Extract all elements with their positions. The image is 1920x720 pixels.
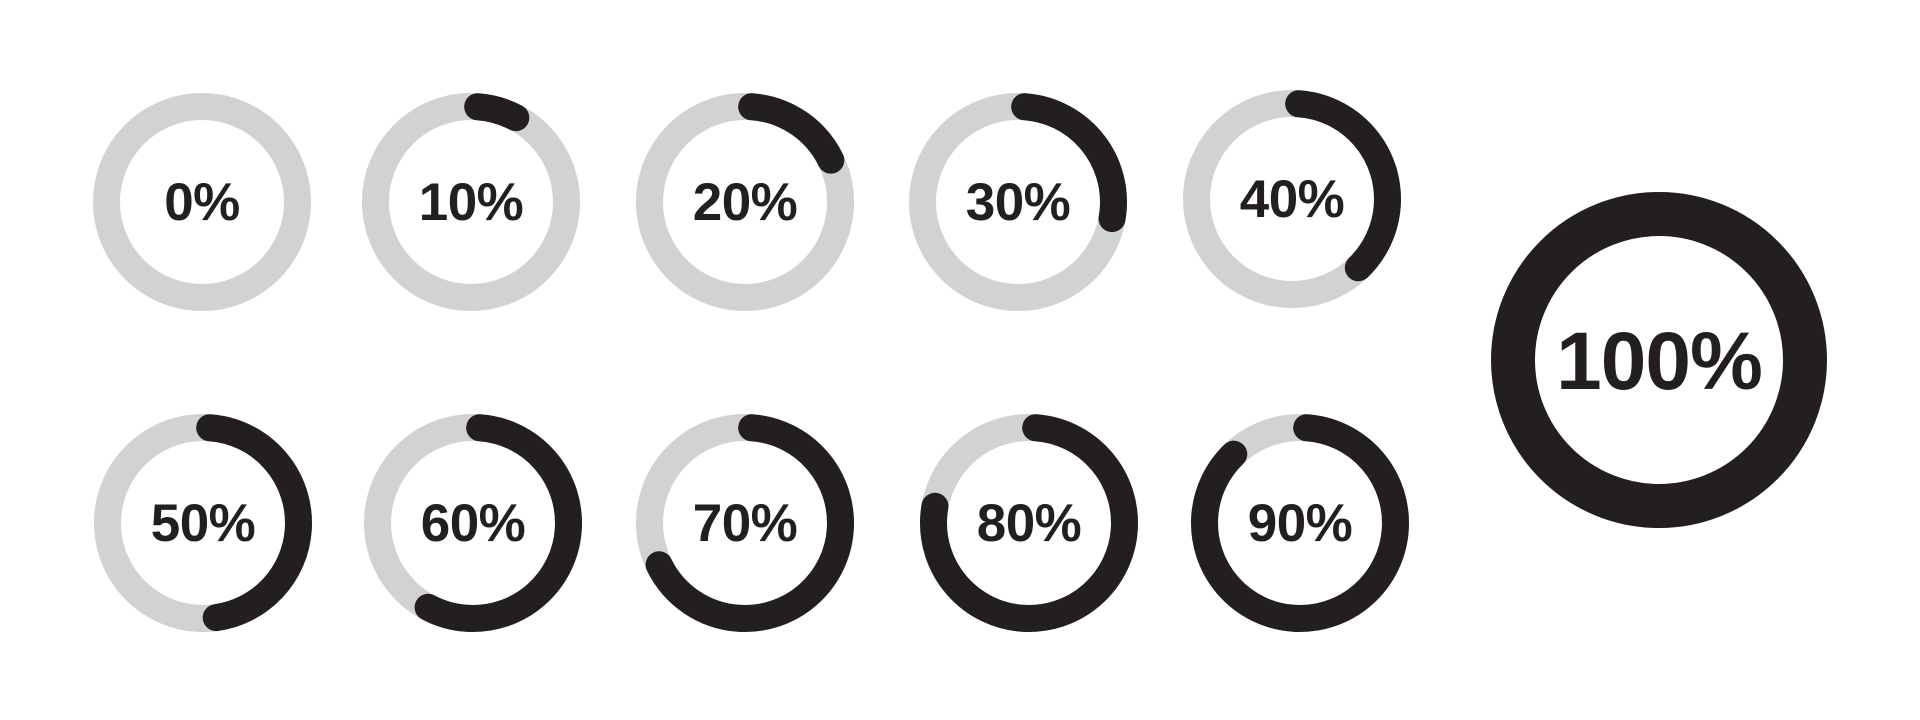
donut: 30%: 30% xyxy=(966,173,1070,232)
donut: 40%: 40% xyxy=(1240,170,1344,229)
donut: 10% xyxy=(369,100,573,304)
donut: 10%: 10% xyxy=(419,173,523,232)
donut: 70%: 70% xyxy=(693,494,797,553)
donut: 50%: 50% xyxy=(151,494,255,553)
donut: 30% xyxy=(916,100,1120,304)
donut: 90%: 90% xyxy=(1248,494,1352,553)
donut: 50% xyxy=(101,421,305,625)
donut: 0% xyxy=(106,106,298,298)
donut: 100% large xyxy=(1513,214,1805,506)
donut: 70% xyxy=(643,421,847,625)
donut: 90% xyxy=(1198,421,1402,625)
donut: 80% xyxy=(927,421,1131,625)
donut: 80%: 80% xyxy=(977,494,1081,553)
donut: 60%: 60% xyxy=(421,494,525,553)
donut: 40% xyxy=(1190,97,1394,301)
donut: 60% xyxy=(371,421,575,625)
donut: 20%: 20% xyxy=(693,173,797,232)
donut: 0%: 0% xyxy=(164,173,240,232)
donut: 20% xyxy=(643,100,847,304)
donut: 100% large: 100% xyxy=(1556,316,1762,407)
